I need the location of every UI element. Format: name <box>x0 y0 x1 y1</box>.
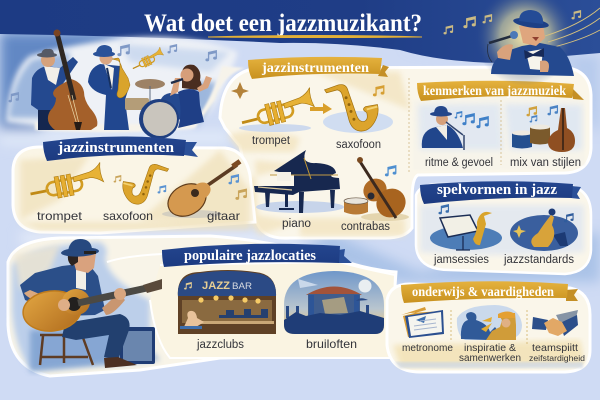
notes <box>114 175 247 200</box>
icon: jazz bar: BAR <box>232 281 253 291</box>
ribbon: spelvormen: spelvormen in jazz <box>437 182 558 198</box>
label: inspiratie en samenwerken <box>459 342 521 364</box>
ribbon: onderwijs: onderwijs & vaardigheden <box>412 285 554 300</box>
panel: spelvormen in jazz <box>416 181 591 274</box>
icon: snare drum <box>344 198 368 214</box>
notes <box>444 11 581 34</box>
head <box>73 252 96 273</box>
label: inspiratie en samenwerken: inspiratie & <box>464 342 516 354</box>
icon: contrabas <box>357 157 411 223</box>
ribbon: onderwijs <box>401 281 578 303</box>
label: saxofoon: saxofoon <box>336 139 381 151</box>
ribbon: kenmerken: kenmerken van jazzmuziek <box>423 83 566 98</box>
panel: kenmerken van jazzmuziek <box>413 81 585 170</box>
panel: onderwijs en vaardigheden <box>387 281 590 372</box>
microphone <box>489 36 512 43</box>
panel: jazzinstrumenten left <box>13 136 255 233</box>
amplifier <box>120 327 155 364</box>
singer <box>170 65 212 128</box>
label: saxofoon: saxofoon <box>103 209 153 223</box>
glow <box>475 0 575 86</box>
saxophone player <box>88 45 130 130</box>
icon: music stand and saxophone <box>430 205 502 250</box>
panel: instruments and styles <box>220 57 591 238</box>
decorative notes <box>373 86 384 96</box>
panel: guitarist and venues <box>8 236 396 376</box>
label: ritme & gevoel: ritme & gevoel <box>425 157 493 169</box>
hand <box>58 299 70 311</box>
label: gitaar: gitaar <box>207 209 240 223</box>
icon: trumpet <box>27 162 105 203</box>
drum kit <box>125 79 192 139</box>
ribbon: jazzinstrumenten gold <box>248 57 389 79</box>
icon: drums and bass <box>512 106 575 152</box>
ribbon: jazzinstrumenten gold: jazzinstrumenten <box>261 61 369 76</box>
divider <box>408 78 410 172</box>
guitar <box>21 288 83 334</box>
label: bruiloften: bruiloften <box>306 337 357 351</box>
icon: handshake <box>532 310 578 336</box>
icon: singer with notes <box>422 106 489 150</box>
label: trompet: trompet <box>37 209 83 223</box>
icon: sparkle <box>231 82 249 99</box>
title: Wat doet een jazzmuzikant? <box>144 10 422 37</box>
icon: inspiration <box>457 305 522 340</box>
icon: guitar <box>162 159 241 223</box>
label: jazzstandards: jazzstandards <box>503 254 574 266</box>
icon: singer with microphone <box>444 0 600 86</box>
label: contrabas: contrabas <box>341 221 390 233</box>
icon: guitarist <box>20 239 162 368</box>
icon: trumpet <box>238 88 316 132</box>
icon: metronome notebook <box>401 307 444 338</box>
background wash <box>0 32 600 282</box>
label: zelfstandigheid: zeifstardigheid <box>529 353 585 363</box>
icon: saxophone <box>323 85 393 133</box>
label: teamspirit: teamspiitt <box>532 342 578 354</box>
label: metronome: metronome <box>402 342 453 354</box>
bass player <box>31 30 97 130</box>
header band <box>0 0 600 63</box>
shirt <box>20 263 105 316</box>
title underline <box>208 36 422 38</box>
icon: wedding stage <box>284 271 384 334</box>
music notes <box>8 45 217 102</box>
icon: arrow <box>310 103 332 114</box>
band backdrop <box>6 37 238 131</box>
icon: saxophone <box>123 164 169 204</box>
blue notes <box>385 166 396 176</box>
label: trompet: trompet <box>252 135 291 147</box>
icon: musician with bass <box>510 208 578 251</box>
label: mix van stijlen: mix van stijlen <box>510 157 581 169</box>
inner curve <box>107 254 395 358</box>
icon: jazz bar: JAZZ <box>202 280 230 292</box>
head <box>519 24 545 46</box>
chair <box>40 335 93 365</box>
warm wash <box>228 70 410 236</box>
jeans <box>62 314 130 360</box>
arm <box>24 290 68 312</box>
suit <box>491 43 574 76</box>
panel: band scene <box>6 30 245 139</box>
ribbon: spelvormen <box>420 181 581 204</box>
double bass <box>48 79 97 130</box>
ribbon: populaire jazzlocaties <box>162 244 352 267</box>
label: jazzclubs: jazzclubs <box>196 339 244 351</box>
icon: grand piano <box>254 150 344 213</box>
ribbon: jazzinstrumenten blue <box>43 136 198 161</box>
icon: jazz bar <box>178 270 276 334</box>
label: piano: piano <box>282 218 311 230</box>
floating trumpet <box>129 47 165 72</box>
hat <box>513 16 549 30</box>
ribbon: jazzinstrumenten blue: jazzinstrumenten <box>57 140 174 156</box>
ribbon: populaire jazzlocaties: populaire jazzlocaties <box>184 248 316 264</box>
label: jamsessies: jamsessies <box>433 254 489 266</box>
shoe <box>104 357 137 368</box>
label: inspiratie en samenwerken: samenwerken <box>459 352 521 364</box>
staff lines <box>545 8 600 48</box>
